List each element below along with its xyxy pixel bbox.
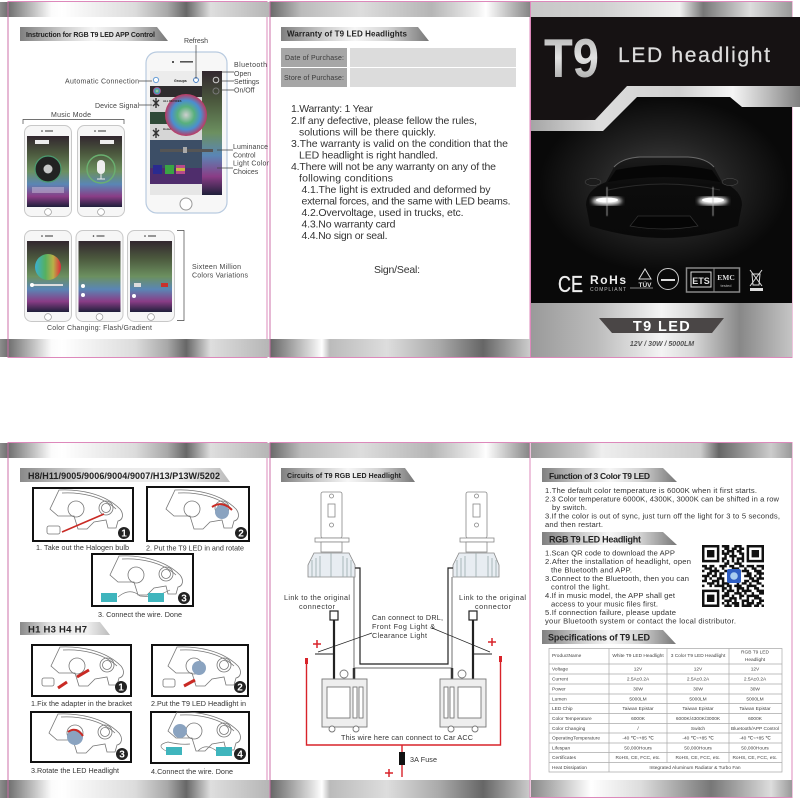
step 1: fix the adapter: [31, 645, 132, 708]
circuit labels: connector: [475, 602, 512, 611]
specifications table: Lifespan: [552, 746, 570, 752]
chevron metal band: [531, 86, 800, 131]
specifications table: Taiwan Epistar: [682, 706, 714, 712]
specifications table: Color Temperature: [552, 716, 592, 722]
step 3: rotate the headlight: [31, 712, 131, 775]
warranty terms: 4.1.The light is extruded and deformed by: [302, 184, 491, 196]
circuit labels: This wire here can connect to Car ACC: [341, 733, 473, 742]
specifications table: 30W: [750, 686, 760, 692]
callout labels for app controls: Open: [234, 71, 251, 78]
specifications table: Current: [552, 676, 569, 682]
3 color function list: 2.3 Color temperature 6000K, 4300K, 3000K can be shifted in a row: [545, 494, 780, 504]
heading: H1 H3 H4 H7 group: [20, 622, 110, 636]
heading: H8 H11 group: [20, 468, 230, 482]
specifications table: 6000K/4300K/3000K: [676, 716, 721, 722]
circuit labels: Link to the original: [284, 593, 350, 602]
callout labels for app controls: Light Color: [233, 160, 270, 168]
heading: warranty: Warranty of T9 LED Headlights: [287, 30, 408, 38]
car with headlights: [538, 97, 789, 273]
specifications table: -40 ℃~+85 ℃: [682, 736, 714, 742]
warranty terms: LED headlight is right handled.: [299, 150, 438, 162]
RGB usage list: 1.Scan QR code to download the APP: [545, 548, 675, 558]
LED bulb right: [453, 492, 499, 577]
specifications table: ProductName: [552, 653, 582, 659]
callout labels for app controls: Color Changing: Flash/Gradient: [47, 325, 152, 332]
product label: T9 LED: [599, 318, 724, 348]
callout labels for app controls: Settings: [234, 79, 260, 86]
callout labels for app controls: Refresh: [184, 38, 208, 45]
main phone with app screen: [146, 52, 227, 213]
black connecting wires: [315, 568, 492, 680]
specifications table: Taiwan Epistar: [739, 706, 771, 712]
title: LED headlight: LED headlight: [618, 44, 770, 67]
specifications table: 2.5A±0.2A: [744, 676, 767, 682]
circuit labels: connector: [299, 602, 336, 611]
specifications table: -40 ℃~+85 ℃: [622, 736, 654, 742]
specifications table: -40 ℃~+85 ℃: [739, 736, 771, 742]
warranty terms: following conditions: [299, 172, 393, 184]
specifications table: RoHS, CE, FCC, etc.: [732, 755, 778, 761]
main phone with app screen: ALL DEVICES: [163, 99, 182, 103]
specifications table: 5000LM: [629, 696, 647, 702]
RGB usage list: 5.If connection failure, please update: [545, 608, 676, 617]
certification icons: COMPLIANT: [590, 287, 626, 293]
step 3: connect the wire: 3. Connect the wire. Done: [98, 610, 182, 619]
specifications table: Bluetooth/APP Control: [731, 726, 779, 732]
3 color function list: and then restart.: [545, 520, 603, 529]
step 1: take out the halogen bulb: 1: [121, 528, 127, 540]
specifications table: OperatingTemperature: [552, 736, 600, 742]
specifications table: [549, 648, 782, 772]
specifications table: 6000K: [631, 716, 646, 722]
step 3: connect the wire: [92, 554, 193, 619]
3 color function list: by switch.: [552, 503, 587, 512]
QR code: [702, 546, 764, 606]
heading: app control: Instruction for RGB T9 LED APP Control: [26, 32, 155, 39]
ballast right: [440, 670, 486, 732]
specifications table: White T9 LED Headlight: [612, 653, 664, 659]
heading: circuits: [281, 468, 415, 482]
specifications table: 2.5A±0.2A: [627, 676, 650, 682]
specifications table: 50,000Hours: [741, 746, 769, 752]
main phone with app screen: Home: [163, 127, 171, 131]
specifications table: 12V: [751, 666, 760, 672]
specifications table: 12V: [634, 666, 643, 672]
step 3: rotate the headlight: 3.Rotate the LED Headlight: [31, 766, 119, 775]
warranty terms: 4.There will not be any warranty on any of the: [291, 161, 496, 173]
heading: RGB T9 LED: [542, 532, 677, 545]
RGB usage list: 3.Connect to the Bluetooth, then you can: [545, 574, 689, 583]
circuit labels: [284, 593, 526, 764]
callout labels for app controls: Sixteen Million: [192, 264, 241, 271]
step 3: rotate the headlight: 3: [119, 750, 125, 760]
step 3: connect the wire: 3: [181, 594, 187, 604]
sign and seal: Sign/Seal:: [374, 264, 420, 276]
specifications table: RGB T9 LED: [741, 650, 769, 656]
heading: function of 3 color: [542, 468, 677, 482]
callout labels for app controls: Music Mode: [51, 112, 91, 119]
color changing phones: [24, 230, 174, 322]
specifications table: LED Chip: [552, 706, 573, 712]
specifications table: Power: [552, 686, 566, 692]
warranty terms: 4.3.No warranty card: [302, 218, 396, 230]
3 color function list: [545, 486, 780, 529]
step 2: put the T9 LED in and rotate: [146, 487, 249, 552]
certification icons: ETS: [692, 276, 710, 286]
warranty terms: external forces, and the same with LED beams.: [302, 196, 510, 208]
main phone with app screen: Groups: [174, 79, 187, 83]
specifications table: RoHS, CE, FCC, etc.: [615, 755, 661, 761]
step 2: put the headlight in: 2.Put the T9 LED Headlight in: [151, 699, 246, 708]
certification icons: [558, 268, 763, 297]
certification icons: RoHs: [590, 273, 626, 287]
logo: T9: T9: [544, 27, 599, 89]
panel: installation steps: [0, 442, 270, 798]
certification icons: EMC: [717, 273, 735, 282]
specifications table: Certificates: [552, 755, 577, 761]
circuit labels: Link to the original: [459, 593, 526, 602]
warranty terms: 4.2.Overvoltage, used in trucks, etc.: [302, 207, 464, 219]
LED bulb left: [308, 492, 355, 577]
certification icons: tested: [721, 283, 731, 288]
product label: T9 LED: T9 LED: [633, 319, 691, 335]
warranty terms: 3.The warranty is valid on the condition that the: [291, 138, 508, 150]
RGB usage list: your Bluetooth system or contact the local distributor.: [545, 616, 736, 626]
specifications table: Switch: [691, 726, 705, 732]
specifications table: 50,000Hours: [624, 746, 652, 752]
circuit labels: Clearance Light: [372, 631, 427, 640]
panel: cover: [531, 2, 800, 358]
RGB usage list: 4.If in music model, the APP shall get: [545, 591, 676, 600]
callout labels for app controls: [23, 38, 270, 332]
specifications table: Integrated Aluminum Radiator & Turbo Fan: [649, 765, 741, 771]
heading: H1 H3 H4 H7 group: H1 H3 H4 H7: [28, 624, 87, 636]
callout labels for app controls: Control: [233, 152, 256, 160]
certification icons: TÜV: [638, 280, 652, 289]
step 4: connect the wire: 4.Connect the wire. Done: [151, 767, 233, 776]
panel: functions and specifications: [530, 442, 792, 798]
step 1: take out the halogen bulb: 1. Take out the Halogen bulb: [36, 543, 129, 552]
form: date and store of purchase: Store of Purchase:: [284, 75, 344, 82]
form: date and store of purchase: Date of Purchase:: [285, 55, 344, 62]
warranty terms: [291, 103, 510, 242]
panel: circuits: [270, 442, 530, 798]
warranty terms: 2.If any defective, please fellow the rules,: [291, 115, 477, 127]
circuit labels: 3A Fuse: [410, 755, 437, 764]
step 1: take out the halogen bulb: [33, 488, 133, 552]
warranty terms: 1.Warranty: 1 Year: [291, 103, 374, 115]
specifications table: 6000K: [748, 716, 763, 722]
callout labels for app controls: On/Off: [234, 88, 255, 94]
specifications table: 12V: [694, 666, 703, 672]
specifications table: Taiwan Epistar: [622, 706, 654, 712]
specifications table: Lumen: [552, 696, 567, 702]
specifications table: Heat Dissipation: [552, 765, 587, 771]
product label: T9 LED: 12V / 30W / 5000LM: [630, 341, 694, 348]
specifications table: 3 Color T9 LED Headlight: [671, 653, 726, 659]
step 1: fix the adapter: 1: [118, 682, 124, 694]
specifications table: 50,000Hours: [684, 746, 712, 752]
step 2: put the T9 LED in and rotate: 2: [238, 528, 244, 540]
RGB usage list: [545, 548, 736, 626]
warranty terms: 4.4.No sign or seal.: [302, 230, 388, 242]
callout labels for app controls: Luminance: [233, 144, 268, 151]
3 color function list: 1.The default color temperature is 6000K when it first starts.: [545, 486, 757, 495]
step 2: put the headlight in: 2: [237, 682, 243, 694]
callout labels for app controls: Device Signal: [95, 103, 139, 110]
specifications table: Voltage: [552, 666, 568, 672]
specifications table: 5000LM: [746, 696, 764, 702]
callout labels for app controls: Automatic Connection: [65, 78, 139, 86]
specifications table: /: [637, 726, 639, 732]
circuit labels: Can connect to DRL,: [372, 613, 443, 622]
callout labels for app controls: Colors Variations: [192, 272, 248, 280]
red power wire and fuse: [305, 638, 502, 777]
step 4: connect the wire: [151, 712, 249, 776]
specifications table: 30W: [693, 686, 703, 692]
specifications table: 5000LM: [689, 696, 707, 702]
specifications table: 2.5A±0.2A: [687, 676, 710, 682]
callout labels for app controls: Bluetooth: [234, 62, 267, 69]
RGB usage list: access to your music files first.: [551, 600, 658, 608]
callout labels for app controls: Choices: [233, 169, 259, 176]
music mode phones: [24, 126, 124, 216]
heading: specifications: [542, 630, 676, 644]
step 4: connect the wire: 4: [237, 750, 243, 760]
specifications table: 30W: [633, 686, 643, 692]
heading: function of 3 color: Function of 3 Color T9 LED: [549, 471, 650, 481]
heading: H8 H11 group: H8/H11/9005/9006/9004/9007/H13/P13W/5202: [28, 471, 220, 481]
heading: warranty: [281, 27, 429, 41]
panel: warranty: [270, 2, 530, 358]
specifications table: Color Changing: [552, 726, 586, 732]
warranty terms: solutions will be there quickly.: [299, 126, 436, 138]
heading: RGB T9 LED: RGB T9 LED Headlight: [549, 534, 641, 544]
panel: app control instructions: [0, 2, 270, 358]
heading: app control: [20, 27, 168, 41]
ballast left: [322, 670, 367, 732]
heading: specifications: Specifications of T9 LED: [548, 632, 650, 642]
RGB usage list: the Bluetooth and APP.: [551, 566, 632, 574]
form: date and store of purchase: [281, 48, 516, 87]
step 1: fix the adapter: 1.Fix the adapter in the bracket: [31, 699, 132, 708]
RGB usage list: 2.After the installation of headlight, open: [545, 557, 691, 566]
specifications table: RoHS, CE, FCC, etc.: [675, 755, 721, 761]
step 2: put the headlight in: [151, 645, 248, 708]
circuit labels: Front Fog Light &: [372, 622, 435, 631]
certification icons: CE: [558, 271, 583, 297]
3 color function list: 3.If the color is out of sync, just turn off the light for 3 to 5 seconds,: [545, 512, 780, 520]
heading: circuits: Circuits of T9 RGB LED Headlight: [287, 473, 402, 480]
specifications table: Headlight: [745, 657, 766, 663]
step 2: put the T9 LED in and rotate: 2. Put the T9 LED in and rotate: [146, 544, 244, 552]
RGB usage list: control the light.: [551, 582, 610, 592]
